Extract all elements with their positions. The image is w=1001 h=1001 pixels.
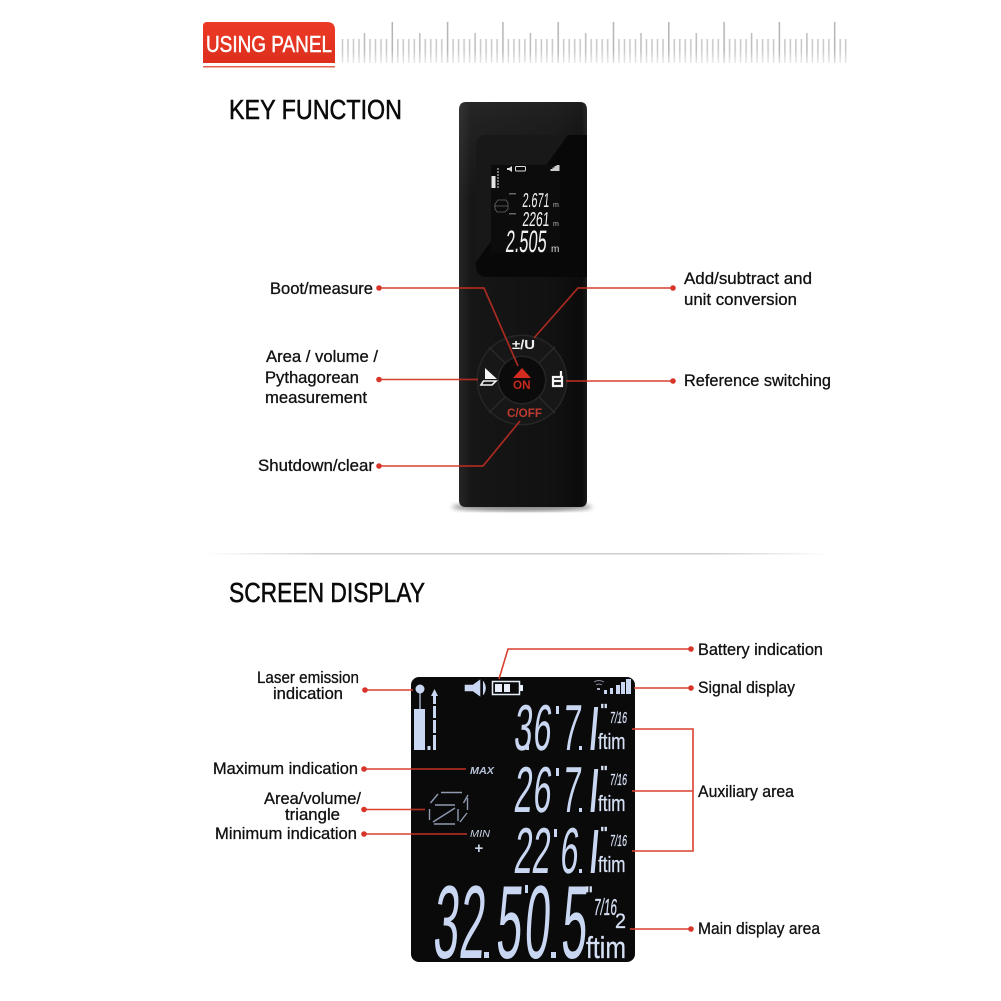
main readout: 7/16	[594, 894, 617, 920]
device body	[459, 102, 587, 507]
auxiliary readout 1: 3	[512, 691, 536, 764]
icon: signal bars	[594, 679, 631, 694]
clear off label: C/OFF	[507, 408, 542, 420]
plus sign: +	[474, 840, 484, 857]
small LCD: m	[551, 244, 559, 255]
callout: reference switching	[566, 372, 831, 390]
callout: area volume triangle	[264, 790, 425, 824]
heading: screen display: SCREEN DISPLAY	[229, 577, 425, 608]
small LCD readouts: 2.671	[522, 190, 550, 212]
callout: boot measure	[270, 280, 518, 366]
panel: large LCD screen	[411, 677, 635, 981]
small LCD	[491, 165, 560, 259]
callout: auxiliary area bracket	[632, 729, 795, 851]
callout: maximum indication: Maximum indication	[213, 760, 358, 778]
callout: add subtract and unit conversion	[534, 270, 812, 338]
max indicator: MAX	[470, 765, 495, 777]
main readout: "	[585, 882, 593, 907]
device shadow	[452, 502, 592, 512]
main readout: 0	[521, 865, 555, 981]
callout: battery indication: Battery indication	[698, 641, 823, 659]
callout: main display area	[630, 920, 821, 938]
callout: reference switching: Reference switching	[684, 372, 831, 390]
auxiliary readout 2: 2	[512, 753, 536, 826]
icon: laser column	[414, 684, 438, 750]
main readout: 3	[430, 865, 464, 981]
main readout	[430, 865, 626, 981]
callout: add subtract and unit conversion: unit conversion	[684, 291, 797, 309]
tab underline	[203, 66, 335, 68]
device: laser meter	[452, 102, 592, 512]
callout: area volume pythagorean	[265, 348, 478, 407]
min indicator: MIN	[470, 828, 490, 840]
glass sheen	[476, 135, 568, 262]
icon: area volume cube	[430, 792, 468, 824]
callout: area volume pythagorean: Pythagorean	[265, 369, 359, 387]
small LCD icons	[497, 168, 499, 188]
callout: auxiliary area bracket: Auxiliary area	[698, 783, 795, 801]
main readout: 5	[493, 865, 527, 981]
auxiliary readout 1	[512, 691, 627, 764]
auxiliary readout 3: 7/16	[610, 833, 627, 850]
auxiliary readout 1: 7/16	[610, 710, 627, 727]
callout: laser emission indication: indication	[273, 685, 343, 703]
callout: area volume pythagorean: Area / volume /	[266, 348, 378, 366]
auxiliary readout 3: 2	[530, 814, 554, 887]
callout: minimum indication: Minimum indication	[215, 825, 357, 843]
main readout: 5	[558, 865, 592, 981]
auxiliary readout 2: 7/16	[610, 772, 627, 789]
on button	[498, 356, 546, 404]
ruler strip	[338, 22, 848, 63]
callout: maximum indication	[213, 760, 466, 778]
small LCD: 2.505	[504, 224, 548, 259]
auxiliary readout 1: ftim	[598, 729, 626, 754]
small LCD shape icon	[494, 200, 508, 212]
icon: area button	[481, 368, 497, 385]
callout: shutdown clear: Shutdown/clear	[258, 457, 375, 475]
main readout: 2	[456, 865, 490, 981]
callout: shutdown clear	[258, 421, 520, 475]
callout: boot measure: Boot/measure	[270, 280, 373, 298]
icon: reference button	[553, 371, 562, 386]
auxiliary readout 1: 6	[531, 691, 555, 764]
heading: key function: KEY FUNCTION	[229, 94, 402, 125]
icon: battery	[492, 682, 523, 694]
control pad	[476, 334, 568, 426]
auxiliary readout 3: 2	[512, 814, 536, 887]
auxiliary readout 2: "	[600, 764, 608, 781]
tab title: USING PANEL	[206, 31, 332, 57]
main readout: ftim	[586, 930, 626, 965]
auxiliary readout 2: ftim	[598, 791, 626, 816]
auxiliary readout 1: "	[600, 702, 608, 719]
auxiliary readout 3: 6	[558, 814, 582, 887]
auxiliary readout 3: "	[600, 825, 608, 842]
callout: main display area: Main display area	[698, 920, 821, 938]
auxiliary readout 2	[512, 753, 627, 826]
on label: ON	[513, 380, 530, 392]
auxiliary readout 3: ftim	[598, 852, 626, 877]
plus minus unit label: ±/U	[512, 338, 535, 352]
auxiliary readout 3	[512, 814, 627, 887]
glass screen	[476, 135, 587, 277]
callout: signal display: Signal display	[698, 679, 796, 697]
auxiliary readout 2: 7	[560, 753, 584, 826]
callout: minimum indication	[215, 825, 467, 843]
red tab	[203, 22, 335, 63]
small LCD: m	[553, 202, 559, 209]
icon: speaker	[465, 680, 486, 696]
on triangle	[513, 368, 531, 378]
callout: area volume triangle: Area/volume/	[264, 790, 361, 808]
auxiliary readout 2: 6	[531, 753, 555, 826]
small LCD: m	[553, 221, 559, 228]
callout: battery indication	[499, 641, 823, 679]
auxiliary readout 1: 7	[560, 691, 584, 764]
callout: area volume triangle: triangle	[285, 806, 340, 824]
callout: laser emission indication: Laser emission	[257, 669, 359, 687]
callout: area volume pythagorean: measurement	[265, 389, 367, 407]
callout: add subtract and unit conversion: Add/subtract and	[684, 270, 812, 288]
small LCD: 2261	[522, 209, 550, 231]
main readout: 2	[615, 910, 626, 933]
header: using panel tab and ruler	[203, 22, 848, 68]
callout: signal display	[634, 679, 796, 697]
callout: laser emission indication	[257, 669, 413, 703]
